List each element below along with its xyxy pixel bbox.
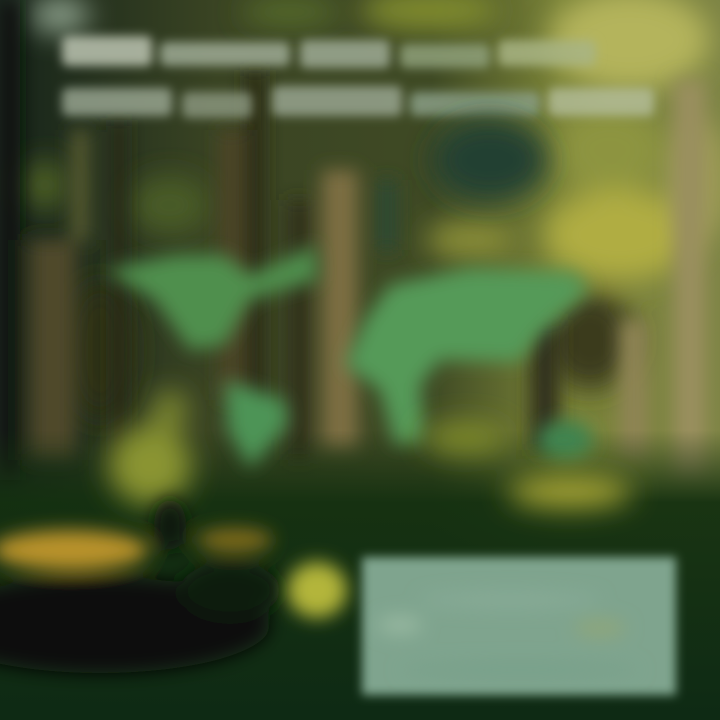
yellow-green foliage highlights: [108, 390, 632, 508]
title: blurred heading lines: [62, 36, 654, 118]
tree trunks: [0, 0, 706, 500]
title line 1: [62, 36, 596, 68]
title line 2: [62, 86, 654, 118]
fallen log: [0, 499, 280, 673]
world map: americas: [105, 245, 318, 468]
dark teal foliage patch under title: [432, 118, 548, 202]
info panel: [362, 557, 676, 695]
yellow-green moss blob: [287, 562, 347, 618]
panel text blur: [378, 592, 640, 678]
world map: eurasia and africa: [345, 268, 593, 460]
ground: [0, 430, 720, 720]
